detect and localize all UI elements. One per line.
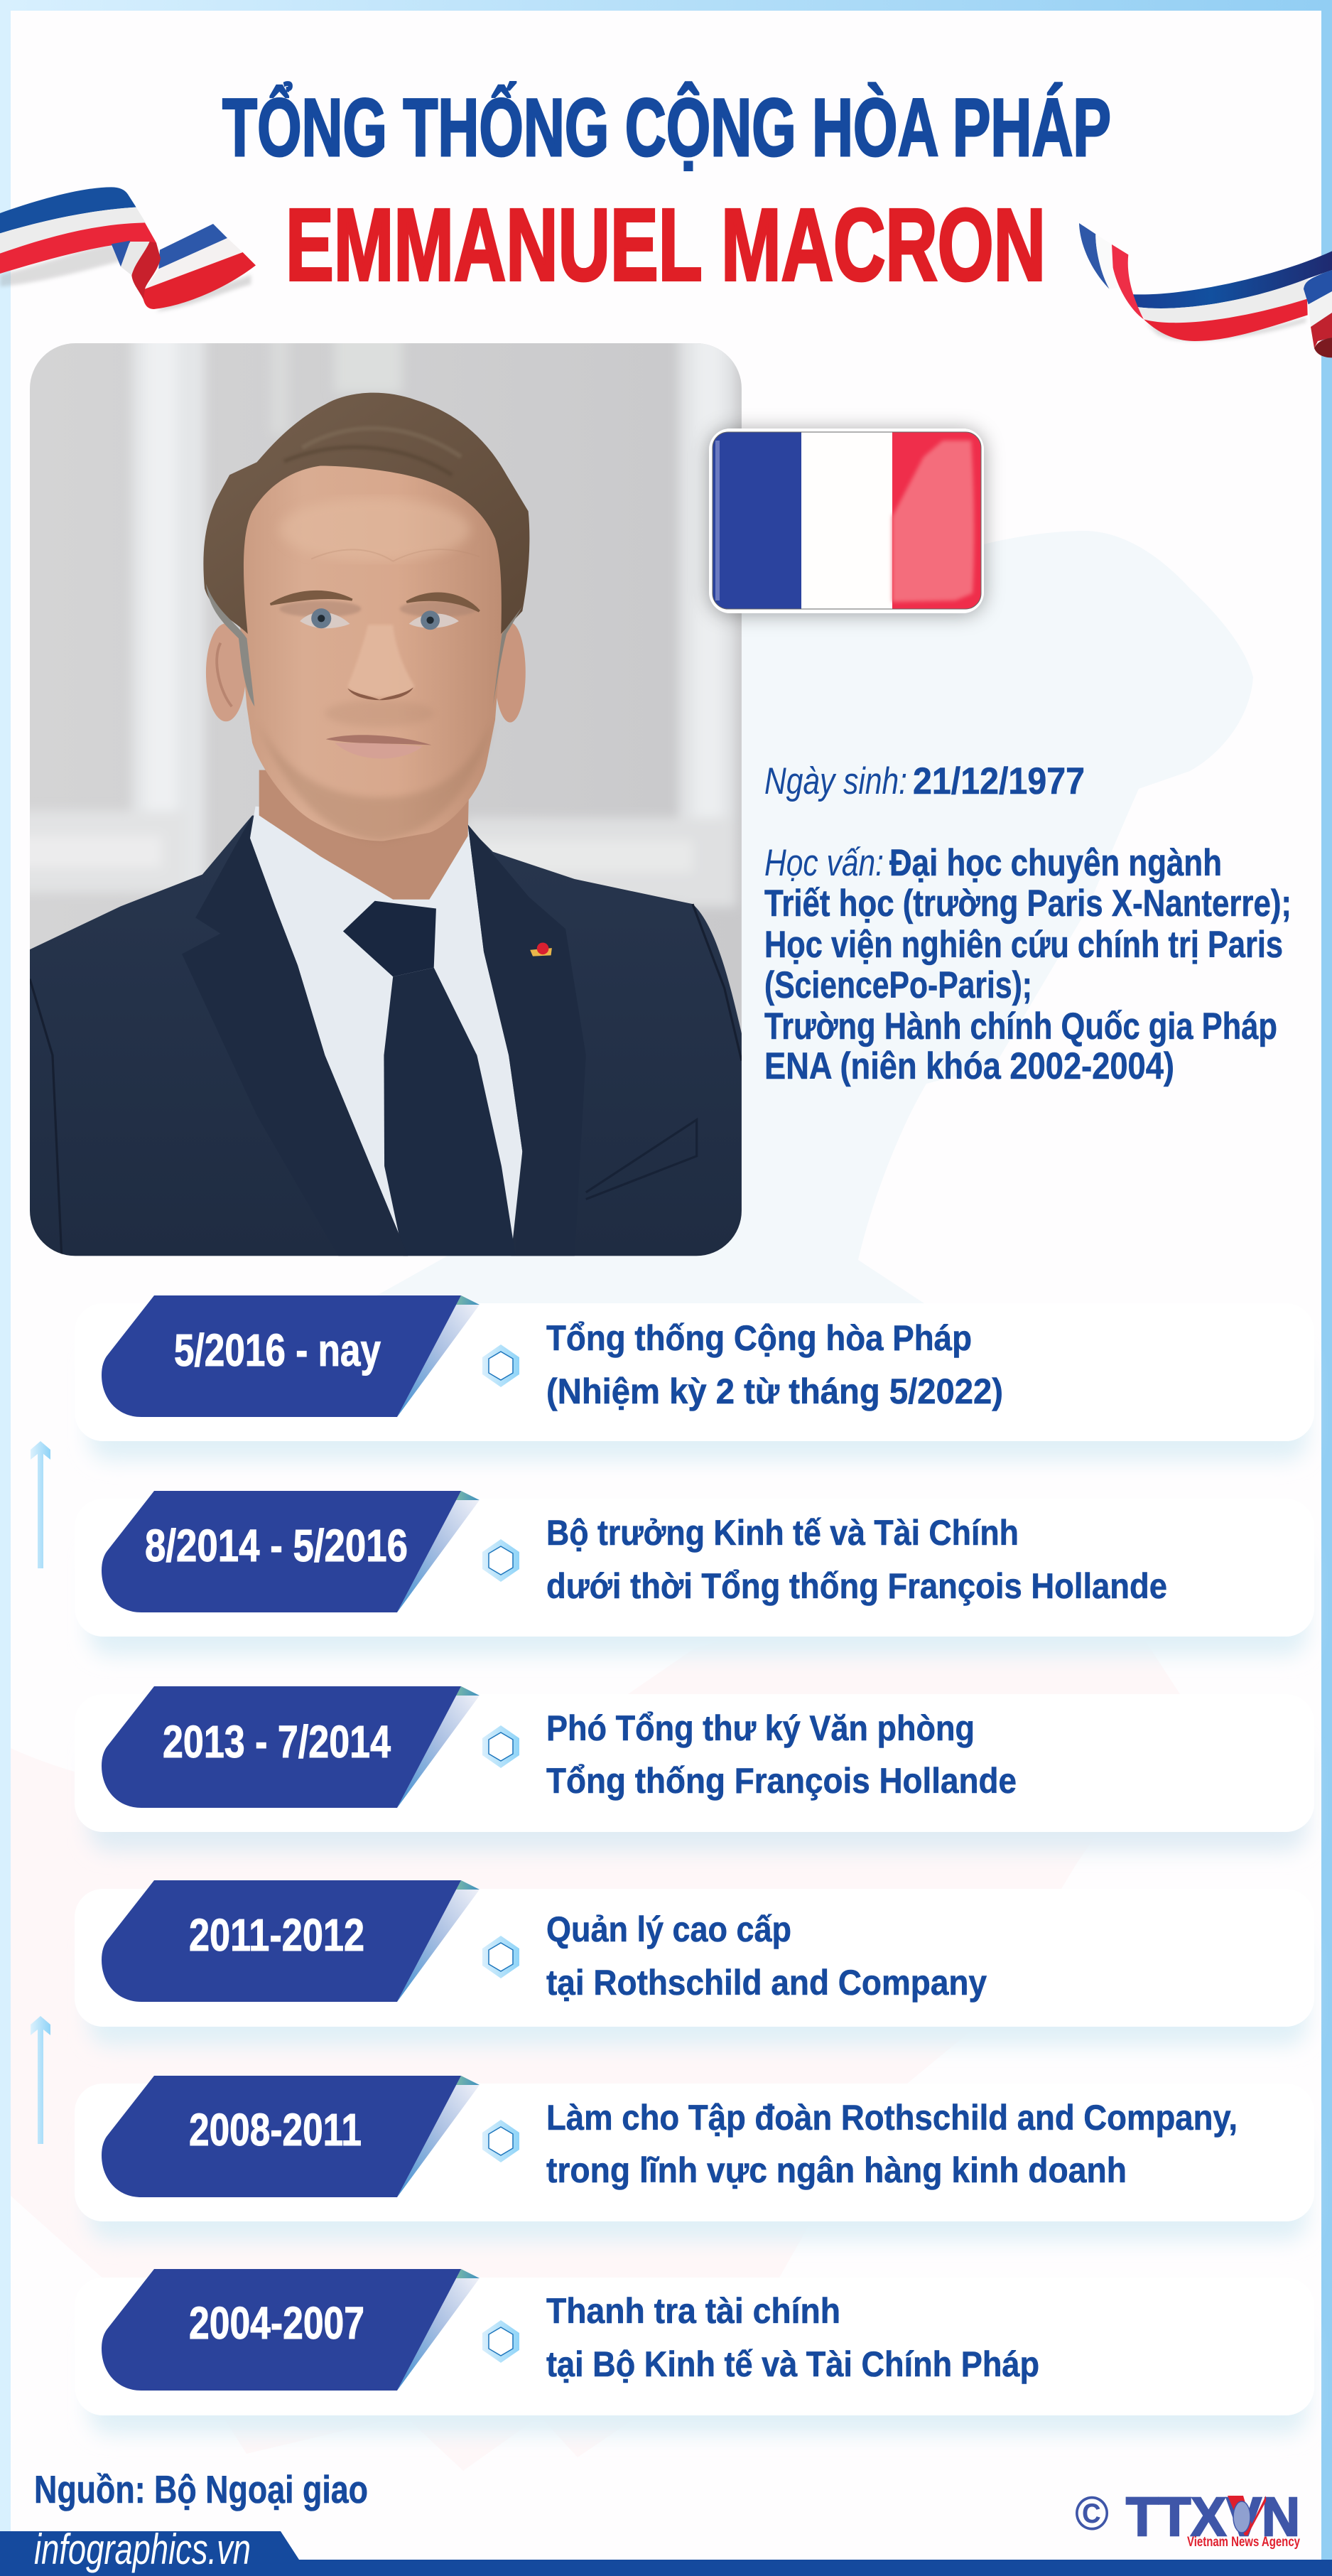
lapel pin: [530, 948, 552, 956]
date tab: [102, 2269, 480, 2391]
logo: TTXVN: TTXVN: [1126, 2486, 1300, 2548]
hexagon marker: [482, 1344, 519, 1387]
description: [546, 1909, 987, 2003]
hexagon marker: [482, 1725, 519, 1768]
footer band: [0, 2531, 1332, 2576]
date tab: 2013 - 7/2014: [163, 1716, 391, 1767]
description: dưới thời Tổng thống François Hollande: [546, 1566, 1167, 1606]
description: trong lĩnh vực ngân hàng kinh doanh: [546, 2150, 1127, 2190]
description: [546, 2291, 1039, 2384]
shirt: [250, 807, 522, 1256]
description: [546, 1708, 1017, 1801]
description: [546, 1318, 1003, 1411]
tie: [343, 901, 436, 976]
nose: [347, 625, 415, 697]
footer website: infographics.vn: [34, 2526, 251, 2573]
hair: [203, 393, 529, 634]
date tab: 8/2014 - 5/2016: [145, 1520, 408, 1571]
description: Bộ trưởng Kinh tế và Tài Chính: [546, 1513, 1019, 1553]
stubble shadow: [270, 746, 480, 841]
hexagon marker: [482, 2120, 519, 2162]
logo: TTXVN: ©: [1075, 2486, 1109, 2540]
description: Thanh tra tài chính: [546, 2291, 840, 2331]
eye sockets: [279, 600, 361, 617]
wall mouldings: [11, 325, 736, 906]
ribbon: top left: [0, 187, 256, 311]
suit jacket: [30, 816, 742, 1256]
source note: Nguồn: Bộ Ngoại giao: [34, 2467, 368, 2511]
panel: 2011 to 2012: [75, 1880, 1314, 2046]
text: education: ENA (niên khóa 2002-2004): [764, 1045, 1174, 1087]
forehead highlight: [284, 502, 470, 557]
description: Tổng thống François Hollande: [546, 1761, 1017, 1801]
date tab: [102, 1491, 480, 1612]
arrow: upward lower: [31, 2016, 50, 2144]
eyes: [300, 613, 350, 628]
logo: TTXVN: Vietnam News Agency: [1187, 2535, 1300, 2550]
description: (Nhiệm kỳ 2 từ tháng 5/2022): [546, 1371, 1003, 1411]
description: Quản lý cao cấp: [546, 1909, 791, 1949]
mouth: [326, 735, 432, 745]
panel: 2016 to now: [75, 1295, 1314, 1460]
panel: 2004 to 2007: [75, 2269, 1314, 2435]
panel: 2008 to 2011: [75, 2076, 1314, 2241]
hexagon marker: [482, 1539, 519, 1582]
date tab: 2011-2012: [189, 1909, 364, 1961]
arrow: upward upper: [31, 1441, 50, 1568]
date tab: [102, 1880, 480, 2002]
hexagon marker: [482, 1936, 519, 1978]
date tab: 2004-2007: [189, 2297, 364, 2349]
ribbon: top right: [1079, 223, 1332, 357]
eyebrows: [271, 591, 352, 604]
text: date of birth: 21/12/1977: [913, 760, 1085, 802]
text: date of birth: Ngày sinh:: [764, 760, 907, 802]
date tab: 2008-2011: [189, 2104, 362, 2155]
title: name: EMMANUEL MACRON: [286, 188, 1046, 302]
lapels: [182, 816, 408, 1256]
hexagon marker: [482, 2320, 519, 2363]
description: tại Rothschild and Company: [546, 1963, 987, 2003]
panel: 2014 to 2016: [75, 1491, 1314, 1656]
text: date of birth: [764, 760, 1085, 802]
description: Phó Tổng thư ký Văn phòng: [546, 1708, 975, 1748]
date tab: [102, 2076, 480, 2197]
grey temples: [206, 584, 254, 706]
date tab: 5/2016 - nay: [174, 1325, 381, 1376]
text: education: Đại học chuyên ngành: [889, 842, 1222, 884]
description: tại Bộ Kinh tế và Tài Chính Pháp: [546, 2344, 1039, 2384]
background shape: pale red map: [11, 1627, 1180, 2471]
background shape: pale blue map: [355, 531, 1253, 1308]
text: education: [764, 842, 1292, 1087]
portrait photo: [11, 325, 742, 1256]
date tab: [102, 1686, 480, 1808]
panel: 2013 to 2014: [75, 1686, 1314, 1851]
text: education: Học vấn:: [764, 842, 884, 884]
neck: [259, 770, 470, 900]
description: Tổng thống Cộng hòa Pháp: [546, 1318, 972, 1358]
description: [546, 2098, 1238, 2190]
description: [546, 1513, 1167, 1606]
ears: [206, 623, 246, 721]
face: [237, 448, 504, 841]
text: education: (SciencePo-Paris);: [764, 964, 1032, 1006]
description: Làm cho Tập đoàn Rothschild and Company,: [546, 2098, 1238, 2138]
date tab: [102, 1295, 480, 1417]
flag of France: [709, 429, 984, 613]
